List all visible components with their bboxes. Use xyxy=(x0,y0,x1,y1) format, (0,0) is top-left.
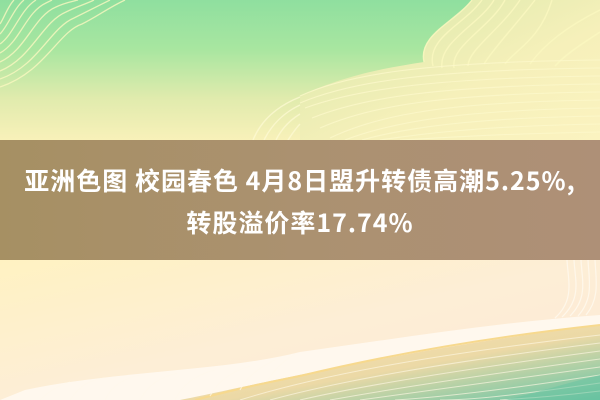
title text: 转股溢价率17.74% xyxy=(186,204,414,240)
title text xyxy=(24,162,576,240)
title text: 亚洲色图 校园春色 4月8日盟升转债高潮5.25%, xyxy=(24,162,576,198)
title band xyxy=(0,140,600,260)
